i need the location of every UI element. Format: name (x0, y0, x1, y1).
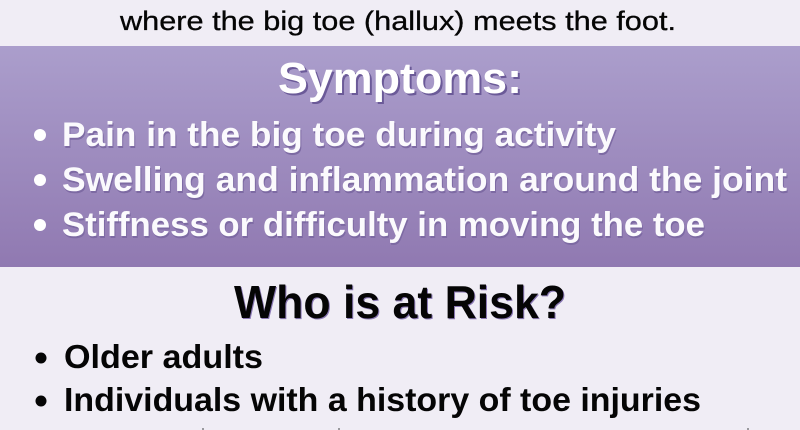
symptom item: stiffness: Stiffness or difficulty in moving the toe (63, 208, 706, 246)
panel: symptoms (0, 46, 800, 267)
symptom item: swelling: Swelling and inflammation around the joint (62, 161, 787, 199)
heading: who is at risk: Who is at Risk? (235, 277, 567, 329)
risk item: older adults: Older adults (64, 338, 263, 375)
heading: symptoms: Symptoms: (280, 56, 524, 105)
symptom item: stiffness: Stiffness or difficulty in moving the toe (62, 206, 705, 244)
heading: who is at risk: Who is at Risk? (234, 276, 566, 328)
risk item: toe injuries: Individuals with a history of toe injuries (64, 381, 701, 418)
heading: symptoms: Symptoms: (278, 54, 522, 103)
symptom item: pain: Pain in the big toe during activity (63, 118, 617, 156)
symptom item: swelling: Swelling and inflammation around the joint (63, 163, 788, 201)
intro text line: where the big toe (hallux) meets the foot. (119, 6, 676, 36)
symptom item: pain: Pain in the big toe during activity (62, 116, 616, 154)
